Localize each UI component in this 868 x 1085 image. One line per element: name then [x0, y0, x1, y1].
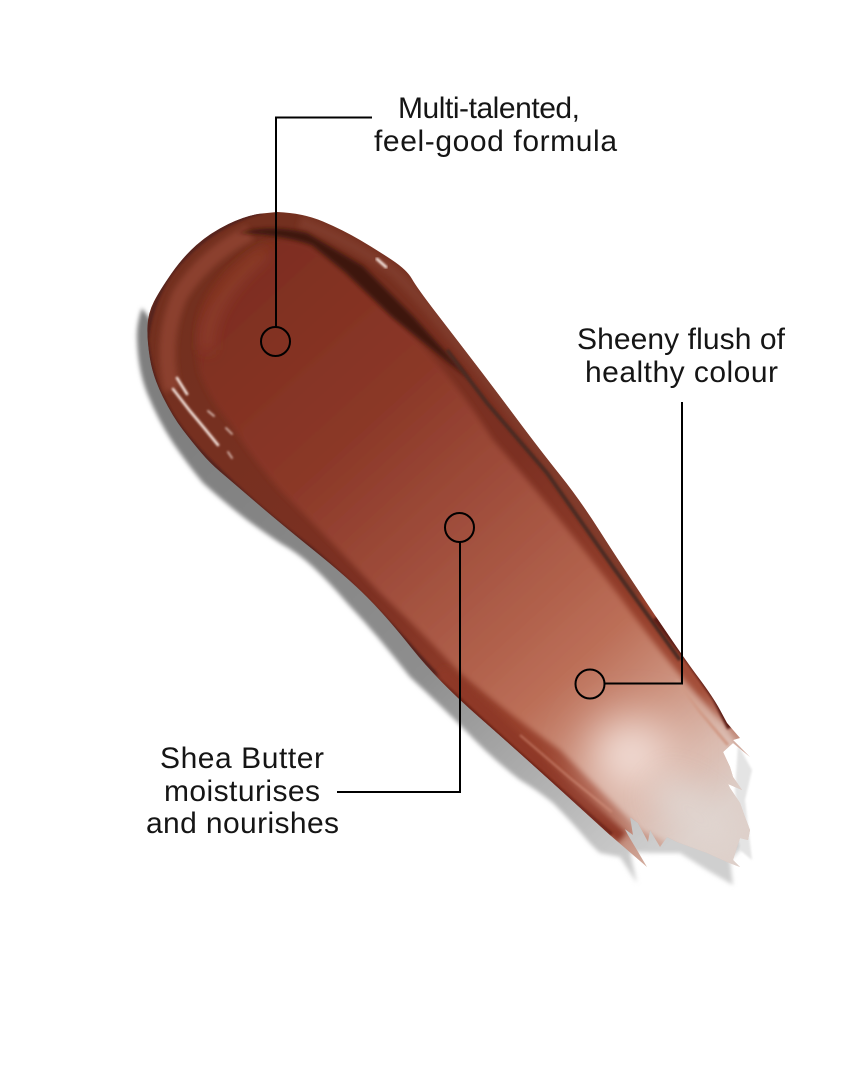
light arc on upper-left flat [204, 256, 260, 344]
callout: Shea Butter moisturises and nourishes: Shea Butter [160, 742, 324, 775]
swatch shadow [137, 308, 752, 885]
callout: Multi-talented formula: feel-good formula [374, 125, 617, 158]
callout: Shea Butter moisturises and nourishes [146, 513, 474, 840]
dark crease along upper edge [238, 228, 470, 379]
callout: Sheeny flush of healthy colour [576, 323, 786, 698]
lower-left rim [440, 672, 622, 838]
callout: Multi-talented formula: Multi-talented, [398, 92, 580, 125]
inner smear surface [196, 239, 760, 880]
callout: Shea Butter moisturises and nourishes: moisturises [164, 775, 320, 808]
callout: Shea Butter moisturises and nourishes: and nourishes [146, 807, 339, 840]
right pink rim line [690, 700, 730, 746]
gloss highlights [173, 259, 386, 458]
lip colour swatch [130, 200, 770, 880]
thin crease continuing down the right edge [447, 350, 680, 660]
callout: Multi-talented formula [261, 92, 617, 356]
rim sheen [168, 233, 250, 390]
callout: Sheeny flush of healthy colour: Sheeny flush of [577, 323, 786, 356]
soft light patch [590, 719, 670, 791]
callout: Sheeny flush of healthy colour: healthy colour [585, 356, 778, 389]
outer dark contour [147, 212, 610, 835]
